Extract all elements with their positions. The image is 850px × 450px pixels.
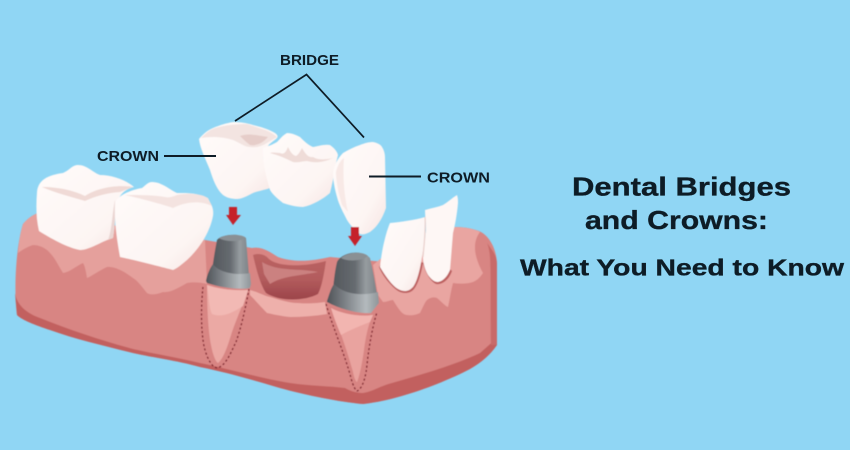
bridge left crown ridge [201,124,277,147]
leader line: left crown [164,155,216,157]
arrow left [226,207,241,225]
implant root right [326,304,377,391]
implant root left [202,285,249,368]
front tooth right [423,195,458,282]
gum highlight left [18,213,207,294]
molar tooth 1 [36,165,134,250]
illustration: dental jaw with bridge [15,122,497,404]
bridge leader lines [235,74,364,138]
front tooth left [380,217,425,291]
front teeth [379,195,458,293]
title: Dental Bridges [572,172,791,202]
bridge left crown ridge shadow [240,134,268,145]
bridge right crown [333,142,386,234]
label: right crown: CROWN [427,170,490,186]
bridge left crown [199,122,278,199]
bridge middle tooth cusps [270,147,333,162]
bridge [199,122,386,234]
molar tooth 2 [115,182,213,270]
front tooth divider [423,217,425,257]
subtitle: What You Need to Know [520,254,844,280]
gum base [15,213,497,404]
gum highlight middle [250,290,327,317]
bridge right crown highlight [336,158,348,212]
title: and Crowns: [585,205,768,235]
abutment left [206,235,251,289]
front tooth gum shadow [379,262,452,293]
arrow right [348,227,362,246]
label: left crown: CROWN [97,148,159,165]
abutment right [327,253,379,313]
title [520,172,844,280]
label: bridge: BRIDGE [280,52,339,69]
leader line: right crown [369,176,421,178]
gum highlight right [373,227,483,315]
bridge middle tooth [263,133,338,207]
socket [253,254,326,300]
